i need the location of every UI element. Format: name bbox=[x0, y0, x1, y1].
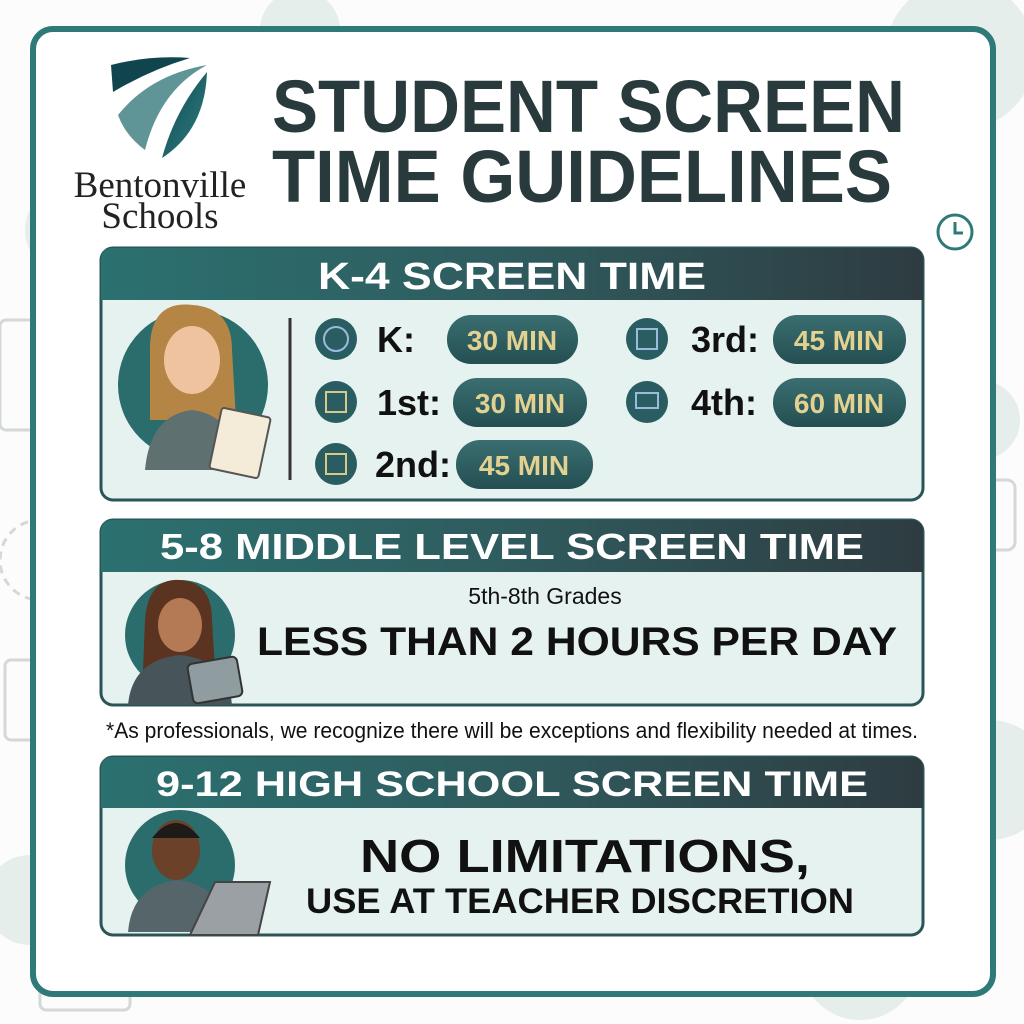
row 1st bbox=[315, 378, 587, 427]
avatar middle student bbox=[125, 580, 243, 705]
panel: 9-12 bbox=[101, 757, 923, 935]
title: STUDENT SCREEN bbox=[272, 65, 905, 148]
text: grades: 5th-8th Grades bbox=[468, 583, 622, 609]
logo bbox=[74, 57, 246, 237]
footnote: *As professionals, we recognize there will be exceptions and flexibility needed at times. bbox=[106, 718, 918, 743]
row 4th: 60 MIN bbox=[794, 388, 884, 419]
text: no limitations: NO LIMITATIONS, bbox=[360, 830, 810, 882]
header 5-8 bbox=[101, 520, 923, 572]
row 4th: 4th: bbox=[691, 382, 757, 423]
panel: K-4 bbox=[101, 248, 923, 500]
icon: clock top right bbox=[938, 215, 972, 249]
row 3rd: 3rd: bbox=[691, 319, 759, 360]
header K-4: K-4 SCREEN TIME bbox=[318, 256, 706, 298]
panel: 9-12: USE AT TEACHER DISCRETION bbox=[306, 882, 854, 921]
icon: shield logo bbox=[111, 57, 207, 158]
title bbox=[272, 65, 905, 218]
header 5-8: 5-8 MIDDLE LEVEL SCREEN TIME bbox=[160, 526, 864, 567]
avatar girl bbox=[118, 304, 271, 479]
logo text: Bentonville bbox=[74, 165, 246, 206]
text: less than 2 hours: LESS THAN 2 HOURS PER DAY bbox=[257, 620, 897, 664]
row 2nd: 2nd: bbox=[375, 444, 451, 485]
row 2nd: 45 MIN bbox=[479, 450, 569, 481]
row 4th bbox=[626, 378, 906, 427]
row 1st: 1st: bbox=[377, 382, 441, 423]
row 3rd: 45 MIN bbox=[794, 325, 884, 356]
row K: 30 MIN bbox=[467, 325, 557, 356]
header 9-12 bbox=[101, 757, 923, 808]
row K: K: bbox=[377, 319, 415, 360]
title: TIME GUIDELINES bbox=[272, 135, 892, 218]
row 1st: 30 MIN bbox=[475, 388, 565, 419]
panel: 5-8 bbox=[101, 520, 923, 705]
row K bbox=[315, 315, 578, 364]
row 3rd bbox=[626, 315, 906, 364]
header 9-12: 9-12 HIGH SCHOOL SCREEN TIME bbox=[156, 765, 868, 804]
logo: Schools bbox=[101, 196, 219, 237]
avatar high school student bbox=[125, 810, 270, 935]
header K-4 bbox=[101, 248, 923, 300]
row 2nd bbox=[315, 440, 593, 489]
